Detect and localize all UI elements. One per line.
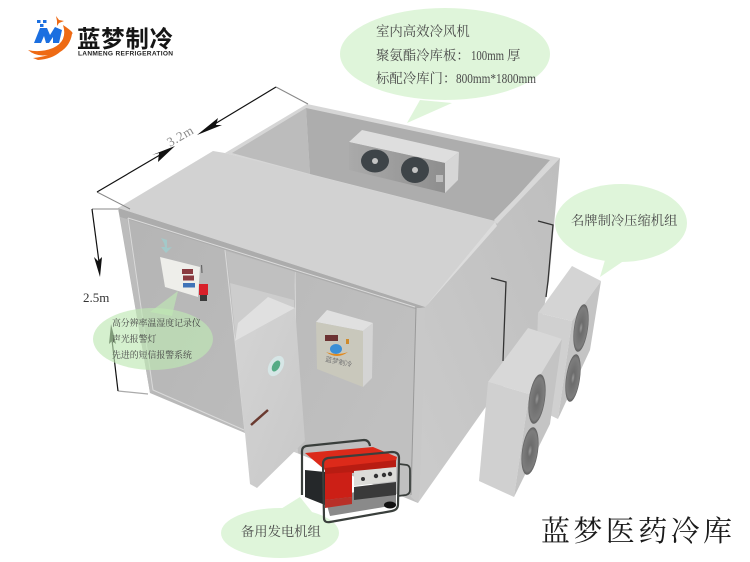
backup generator	[302, 440, 410, 522]
callout: evaporator and panel specs: 室内高效冷风机	[376, 23, 470, 39]
room interior	[225, 104, 560, 226]
teal mark above recorder	[161, 238, 172, 253]
generator fuel tank	[305, 447, 397, 470]
logo: LANMENG REFRIGERATION	[78, 50, 173, 58]
generator control panel	[354, 467, 396, 486]
callout: evaporator and panel specs: 800mm*1800mm	[456, 71, 536, 86]
ceiling	[118, 151, 497, 307]
cold room	[118, 104, 560, 503]
doorway opening	[230, 283, 297, 453]
callout: evaporator and panel specs	[340, 8, 550, 123]
door	[235, 297, 305, 488]
callout: monitoring and alarm: 高分辨率温湿度记录仪	[112, 317, 201, 328]
callout: backup generator	[221, 497, 339, 558]
refrigerant pipes	[491, 221, 553, 361]
callout: backup generator: 备用发电机组	[241, 523, 321, 539]
dimension: height 2.5m: 2.5m	[83, 290, 109, 305]
wall panel seams	[128, 218, 416, 495]
logo	[28, 16, 173, 60]
door header panel	[226, 251, 295, 300]
front wall	[118, 208, 425, 503]
temperature recorder panel	[160, 257, 202, 297]
compressor unit: front condenser	[479, 328, 562, 497]
callout: evaporator and panel specs: 标配冷库门：	[376, 70, 456, 86]
callout: monitoring and alarm	[93, 291, 213, 370]
generator engine	[305, 470, 325, 505]
right side wall	[418, 158, 560, 503]
logo: 蓝梦制冷	[77, 26, 173, 52]
title: 蓝梦医药冷库	[541, 515, 735, 548]
dimension: width 3.2m	[97, 87, 308, 209]
callout: monitoring and alarm: 声光报警灯	[112, 333, 156, 344]
callout: monitoring and alarm: 先进的短信报警系统	[112, 349, 192, 360]
control box: 蓝梦制冷	[324, 354, 353, 369]
compressor unit: rear condenser	[535, 266, 601, 419]
callout: compressor unit	[555, 184, 687, 277]
callout: compressor unit: 名牌制冷压缩机组	[571, 212, 677, 228]
dimension: width 3.2m: 3.2m	[164, 122, 196, 150]
generator front frame	[323, 452, 399, 522]
control box	[316, 310, 373, 387]
callout: evaporator and panel specs: 100mm	[471, 48, 504, 63]
generator rear frame	[302, 440, 370, 495]
callout: evaporator and panel specs: 聚氨酯冷库板：	[376, 47, 470, 63]
dimension: height 2.5m	[83, 209, 148, 394]
generator label	[325, 472, 352, 500]
alarm lamp	[199, 284, 208, 301]
evaporator fan unit	[349, 130, 459, 193]
callout: evaporator and panel specs: 厚	[507, 48, 520, 63]
